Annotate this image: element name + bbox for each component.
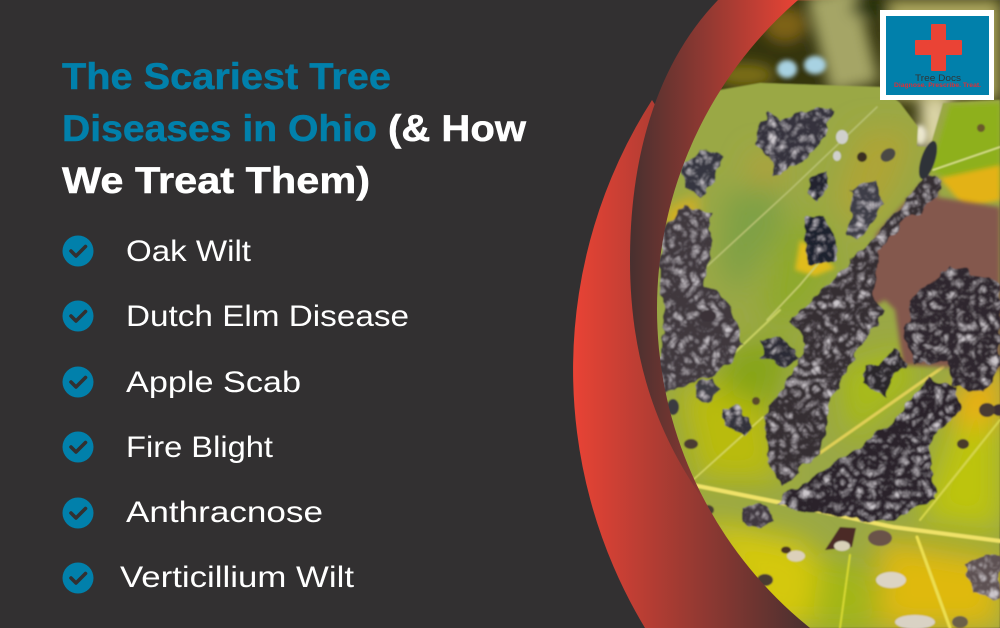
item: Anthracnose: Anthracnose xyxy=(126,496,323,529)
item: Verticillium Wilt xyxy=(62,561,355,594)
logo tagline: Diagnose. Prescribe. Treat. xyxy=(894,82,981,89)
leaf body xyxy=(640,83,1000,628)
item: Oak Wilt: Oak Wilt xyxy=(126,235,252,268)
item: Oak Wilt xyxy=(62,235,252,268)
icon: red cross xyxy=(915,24,962,71)
logo: Tree Docs xyxy=(880,10,994,100)
dark blotches xyxy=(660,110,1000,598)
red crescent xyxy=(573,100,830,628)
checklist of diseases xyxy=(62,235,409,594)
item: Apple Scab: Apple Scab xyxy=(126,366,301,399)
small leaf spots xyxy=(667,124,1000,628)
item: Dutch Elm Disease: Dutch Elm Disease xyxy=(126,300,409,333)
diseased pink-brown tissue xyxy=(872,183,1000,372)
title: The Scariest Tree xyxy=(62,56,391,97)
leaf colour zones xyxy=(665,103,1000,628)
item: Fire Blight xyxy=(62,431,274,464)
title: We Treat Them) xyxy=(62,160,370,201)
leaf veins xyxy=(693,107,1000,628)
logo name: Tree Docs xyxy=(915,73,961,84)
dark gradient band xyxy=(630,0,840,495)
title: (& How xyxy=(388,108,526,149)
item: Verticillium Wilt: Verticillium Wilt xyxy=(120,561,355,594)
title: Diseases in Ohio xyxy=(62,108,377,149)
blurred foliage backdrop xyxy=(720,0,1000,148)
item: Apple Scab xyxy=(62,366,301,399)
item: Fire Blight: Fire Blight xyxy=(126,431,274,464)
item: Anthracnose xyxy=(62,496,323,529)
photo: diseased leaf xyxy=(640,0,1000,628)
title xyxy=(62,56,526,201)
